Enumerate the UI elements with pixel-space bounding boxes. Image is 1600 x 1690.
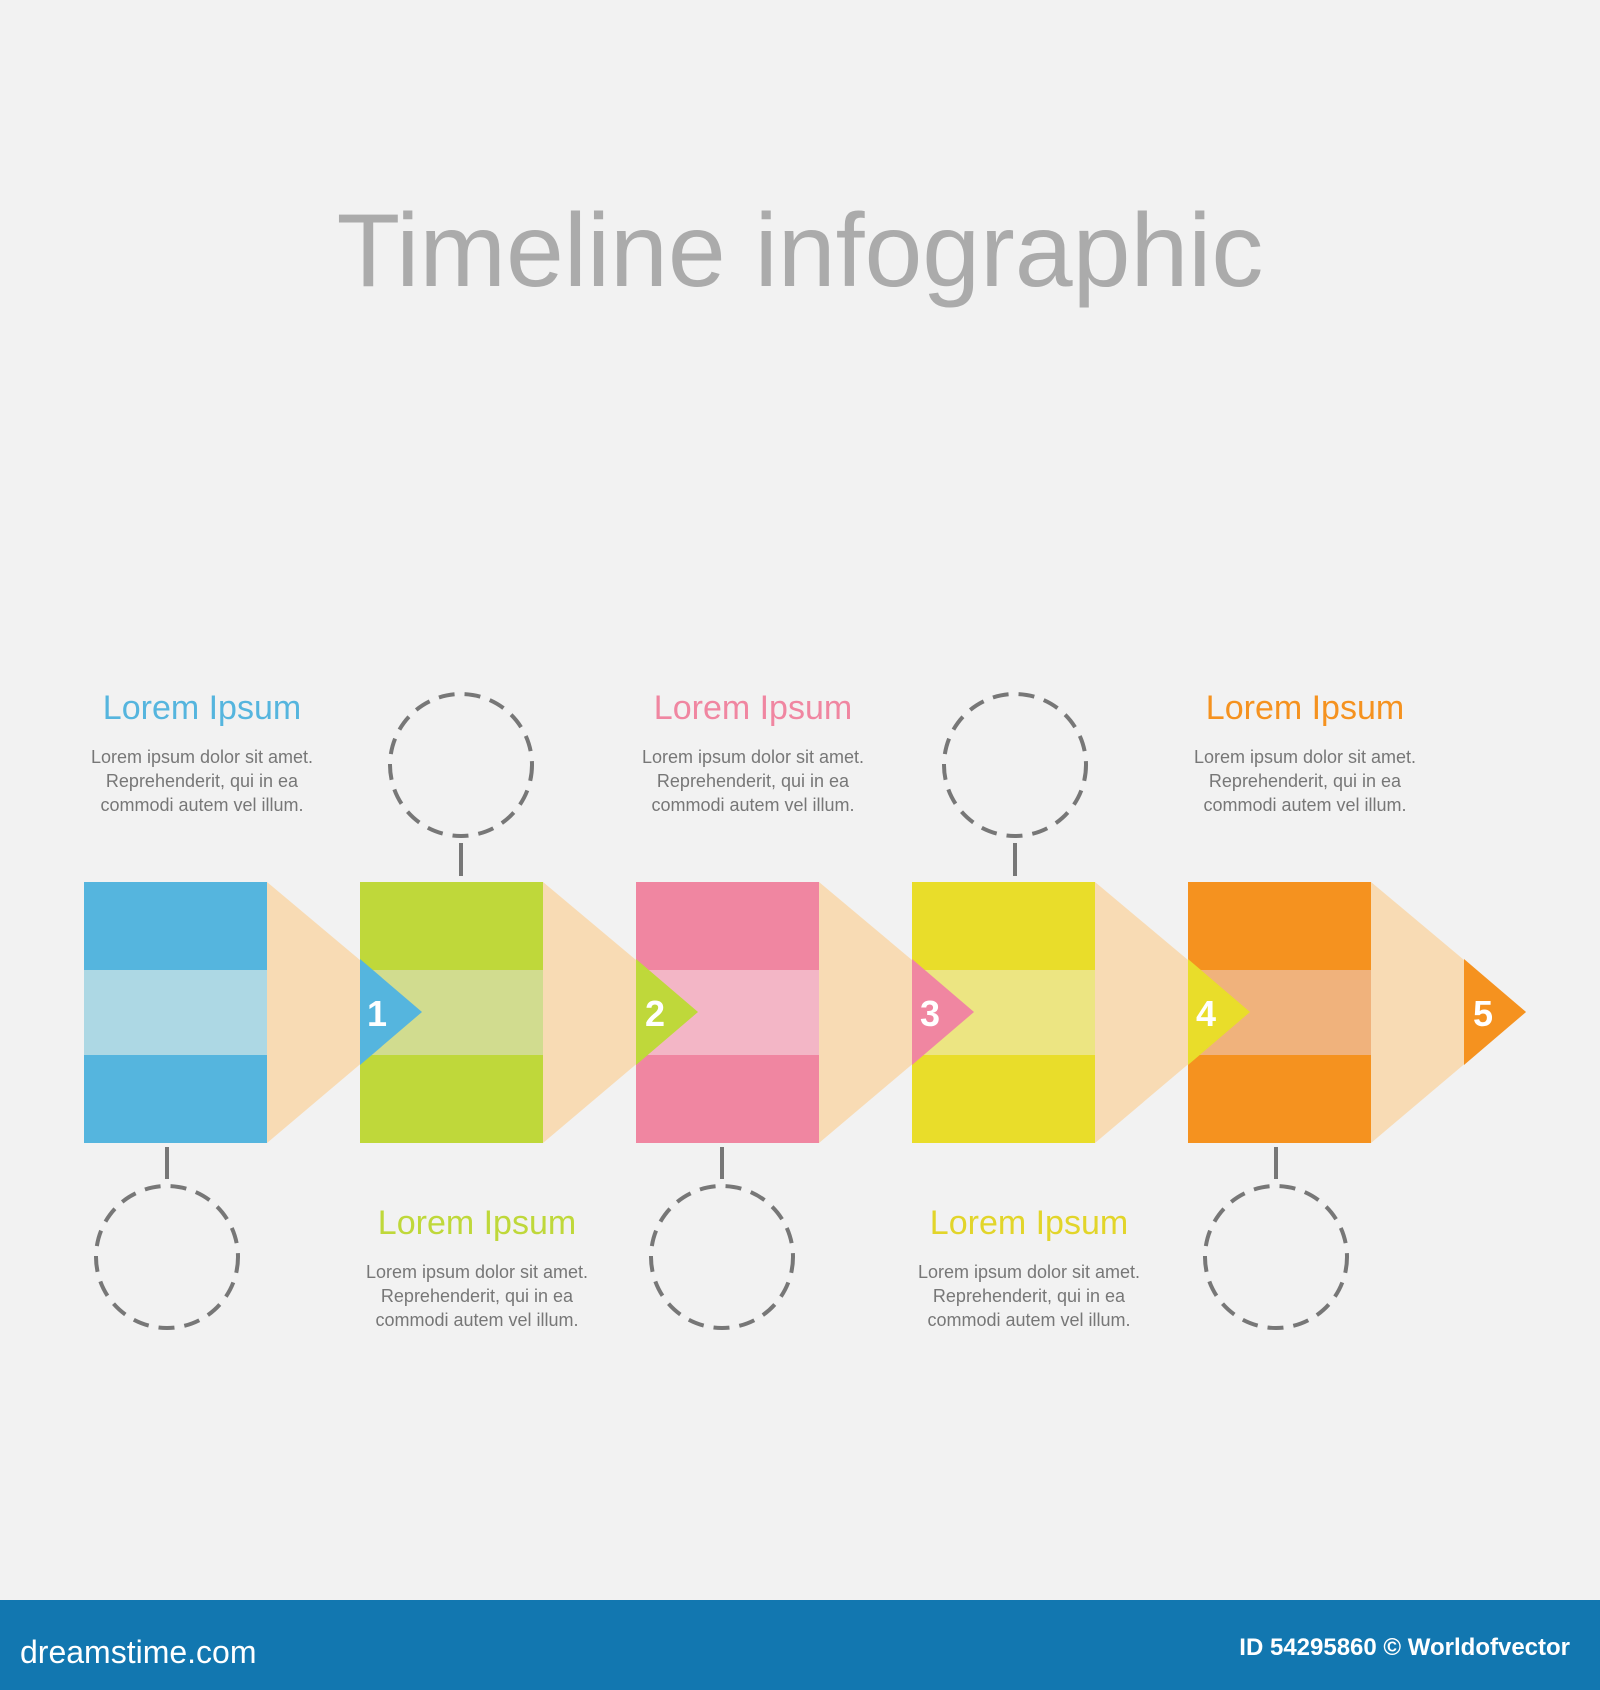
text block 1 [91,689,313,815]
tip 5: 5 [1473,993,1493,1034]
text block 1: commodi autem vel illum. [100,795,304,815]
footer bar [0,1600,1600,1690]
pencil 5 [1188,882,1526,1143]
text block 3 [642,689,864,815]
text block 4: commodi autem vel illum. [927,1310,1131,1330]
connector circle bottom 3 [651,1147,793,1328]
text block 2: Reprehenderit, qui in ea [381,1286,574,1306]
footer bar: ID 54295860 © Worldofvector [1239,1634,1570,1661]
text block 5: Lorem Ipsum [1206,689,1404,727]
pencil 4 [912,882,1250,1143]
text block 3: Lorem Ipsum [654,689,852,727]
tip 2: 2 [645,993,665,1034]
pencil 2 [360,882,698,1143]
text block 2 [366,1204,588,1330]
connector circle top 4 [944,694,1086,876]
connector circle bottom 1 [96,1147,238,1328]
tip 3: 3 [920,993,940,1034]
tip 1 [360,959,422,1065]
text block 4: Reprehenderit, qui in ea [933,1286,1126,1306]
text block 4 [918,1204,1140,1330]
text block 4: Lorem ipsum dolor sit amet. [918,1262,1140,1282]
pencil 1 [84,882,422,1143]
text block 1: Lorem Ipsum [103,689,301,727]
text block 5: commodi autem vel illum. [1203,795,1407,815]
pencil 3 [636,882,974,1143]
text block 3: commodi autem vel illum. [651,795,855,815]
text block 2: commodi autem vel illum. [375,1310,579,1330]
footer bar: dreamstime.com [20,1634,256,1670]
text block 3: Reprehenderit, qui in ea [657,771,850,791]
text block 2: Lorem ipsum dolor sit amet. [366,1262,588,1282]
tip 1: 1 [367,993,387,1034]
text block 3: Lorem ipsum dolor sit amet. [642,747,864,767]
tip 4 [1188,959,1250,1065]
text block 5: Lorem ipsum dolor sit amet. [1194,747,1416,767]
tip 4: 4 [1196,993,1216,1034]
text block 2: Lorem Ipsum [378,1204,576,1242]
text block 1: Lorem ipsum dolor sit amet. [91,747,313,767]
text block 4: Lorem Ipsum [930,1204,1128,1242]
title: Timeline infographic [337,193,1263,309]
connector circle bottom 5 [1205,1147,1347,1328]
tip 5 [1464,959,1526,1065]
text block 5 [1194,689,1416,815]
text block 1: Reprehenderit, qui in ea [106,771,299,791]
tip 3 [912,959,974,1065]
text block 5: Reprehenderit, qui in ea [1209,771,1402,791]
tip 2 [636,959,698,1065]
connector circle top 2 [390,694,532,876]
